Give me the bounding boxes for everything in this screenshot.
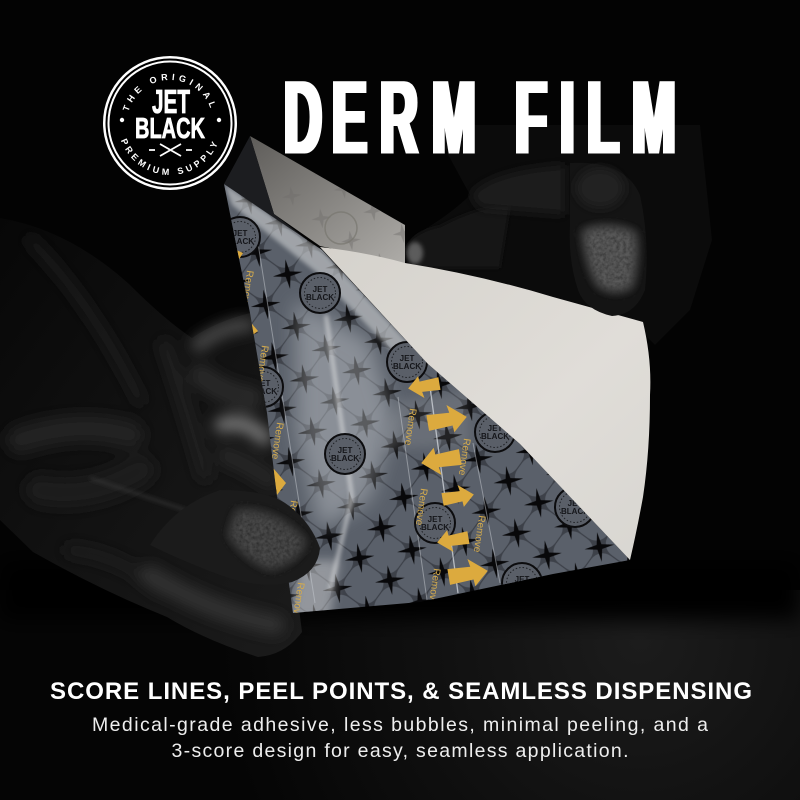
brand badge bbox=[103, 56, 237, 190]
description bbox=[92, 714, 708, 762]
remove labels: Remove bbox=[471, 515, 487, 553]
badge dots bbox=[120, 118, 221, 122]
logo seals bbox=[220, 217, 595, 603]
ghost logo bbox=[325, 212, 357, 244]
remove labels bbox=[239, 270, 487, 620]
badge top arc text: THE ORIGINAL bbox=[122, 74, 215, 110]
right hand big fingertip bbox=[570, 163, 647, 316]
remove labels: Remove bbox=[290, 582, 306, 620]
backing sheet bbox=[250, 136, 405, 264]
remove labels: Remove bbox=[269, 422, 285, 460]
badge bottom arc text: PREMIUM SUPPLY bbox=[121, 138, 217, 175]
remove labels: Remove bbox=[402, 408, 418, 446]
yellow arrows bbox=[407, 374, 489, 589]
light sheen bbox=[224, 184, 470, 620]
badge crossed mark bbox=[149, 144, 192, 156]
title: DERM FILM bbox=[284, 59, 676, 176]
remove labels: Remove bbox=[413, 488, 429, 526]
peeled white liner sheet bbox=[320, 247, 650, 560]
film: dark upper flap bbox=[224, 136, 320, 250]
remove labels: Remove bbox=[239, 270, 255, 308]
badge wordmark bbox=[135, 83, 205, 145]
remove labels: Remove bbox=[426, 568, 442, 606]
left gloved hand bbox=[0, 218, 319, 657]
remove labels: Remove bbox=[283, 500, 299, 538]
description: Medical-grade adhesive, less bubbles, minimal peeling, and a bbox=[92, 714, 708, 736]
badge wordmark: JET bbox=[152, 83, 190, 120]
subheading: SCORE LINES, PEEL POINTS, & SEAMLESS DISPENSING bbox=[50, 678, 752, 705]
glove highlights bbox=[20, 240, 275, 625]
fingertip sheen bbox=[407, 242, 423, 264]
film with printed pattern bbox=[224, 184, 630, 613]
remove labels: Remove bbox=[254, 345, 270, 383]
description: 3-score design for easy, seamless application. bbox=[172, 740, 628, 762]
left thumb tip over film bbox=[150, 490, 320, 585]
score lines bbox=[257, 237, 500, 603]
badge wordmark: BLACK bbox=[135, 113, 205, 145]
yellow peel tabs bbox=[232, 248, 286, 495]
glove crease bbox=[90, 478, 215, 520]
background: top shadow over table edge bbox=[0, 560, 800, 620]
right gloved hand bbox=[406, 125, 712, 345]
remove labels: Remove bbox=[456, 438, 472, 476]
background: table surface bbox=[0, 590, 800, 800]
